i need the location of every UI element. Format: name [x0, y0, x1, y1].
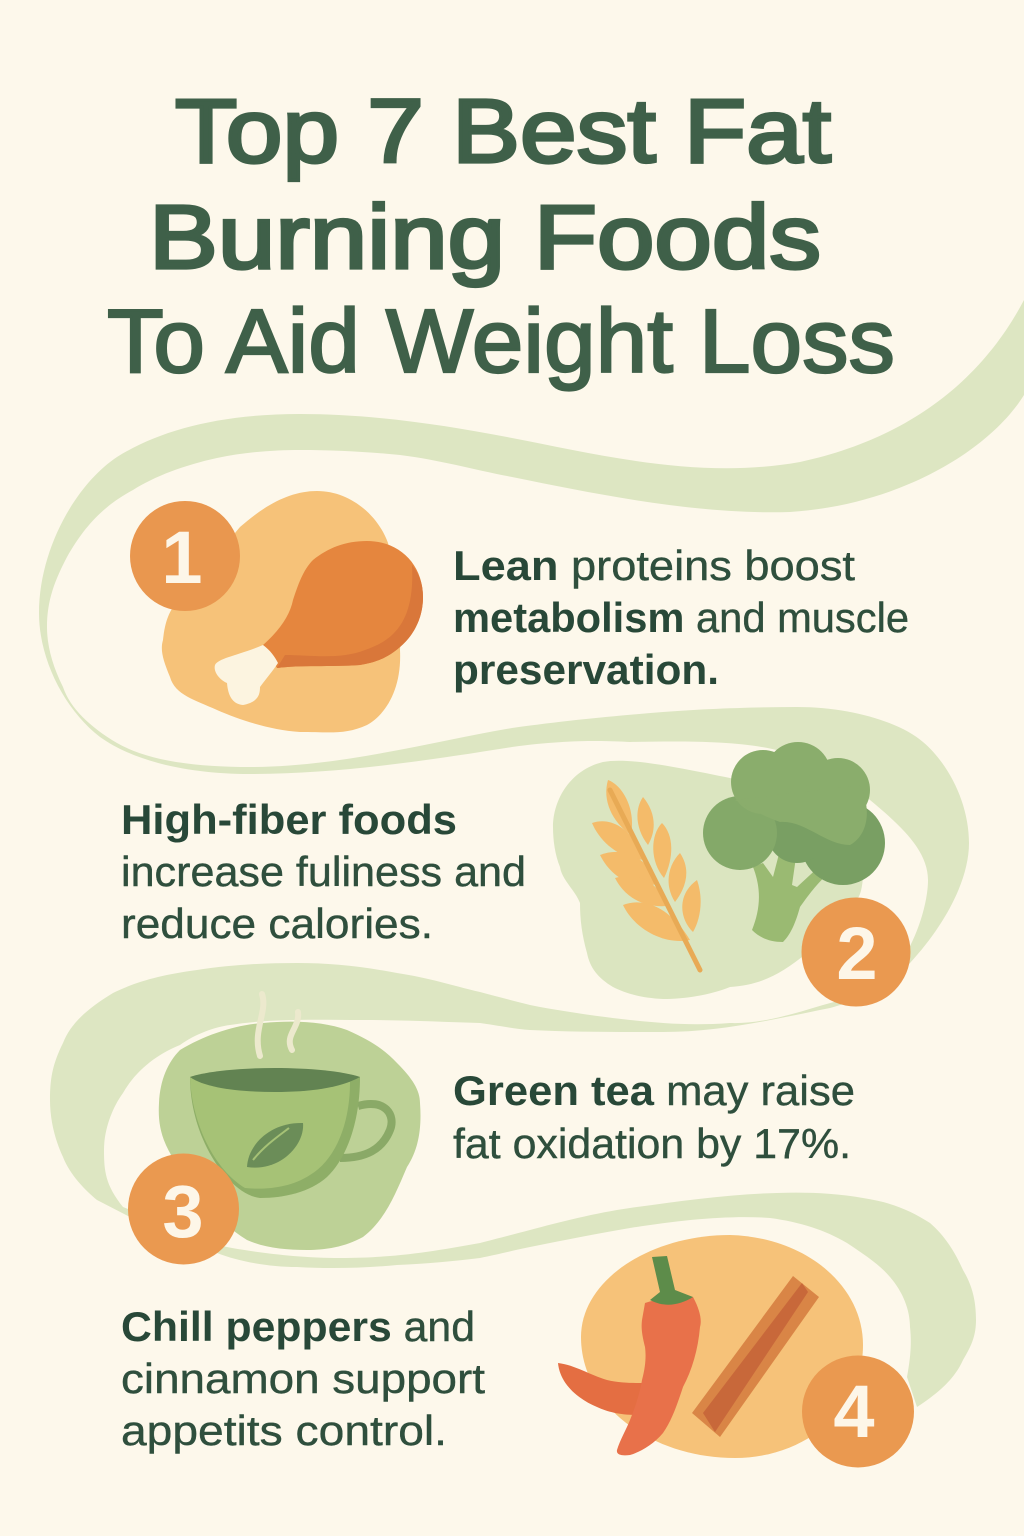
text: green tea: fat oxidation by 17%. — [453, 1120, 851, 1167]
icon: tea cup on green blob — [128, 994, 420, 1264]
text: chili and cinnamon: Chill peppers and — [121, 1303, 475, 1350]
title — [107, 82, 895, 392]
number badge 2 — [802, 898, 910, 1006]
number badge 1: 1 — [161, 516, 203, 599]
text: high-fiber foods: High-fiber foods — [121, 796, 457, 843]
number badge 2: 2 — [836, 912, 878, 995]
text: high-fiber foods: reduce calories. — [121, 900, 433, 947]
text: chili and cinnamon: appetits control. — [121, 1407, 447, 1454]
text: lean proteins: Lean proteins boost — [453, 542, 855, 589]
text: green tea: Green tea may raise — [453, 1067, 855, 1114]
text: lean proteins — [453, 542, 909, 693]
text: high-fiber foods — [121, 796, 526, 947]
panel: high-fiber foods — [121, 742, 910, 1006]
number badge 3: 3 — [162, 1170, 204, 1253]
title: To Aid Weight Loss — [107, 292, 895, 392]
panel: chili and cinnamon — [121, 1235, 914, 1468]
text: high-fiber foods: increase fuliness and — [121, 848, 526, 895]
number badge 1 — [130, 501, 240, 611]
text: chili and cinnamon — [121, 1303, 485, 1454]
number badge 4 — [802, 1356, 914, 1468]
number badge 3 — [128, 1154, 239, 1264]
title: Burning Foods — [149, 188, 821, 288]
panel: green tea — [128, 994, 855, 1264]
text: lean proteins: preservation. — [453, 646, 719, 693]
panel: lean proteins — [130, 491, 909, 732]
icon: wheat and broccoli on green blob — [553, 742, 910, 1006]
text: lean proteins: metabolism and muscle — [453, 594, 909, 641]
icon: chicken drumstick on orange blob — [130, 491, 423, 732]
icon: chili pepper and cinnamon on orange blob — [558, 1235, 914, 1468]
title: Top 7 Best Fat — [175, 82, 831, 182]
text: chili and cinnamon: cinnamon support — [121, 1355, 485, 1402]
text: green tea — [453, 1067, 855, 1167]
winding green ribbon — [39, 300, 1024, 1407]
number badge 4: 4 — [833, 1370, 875, 1453]
